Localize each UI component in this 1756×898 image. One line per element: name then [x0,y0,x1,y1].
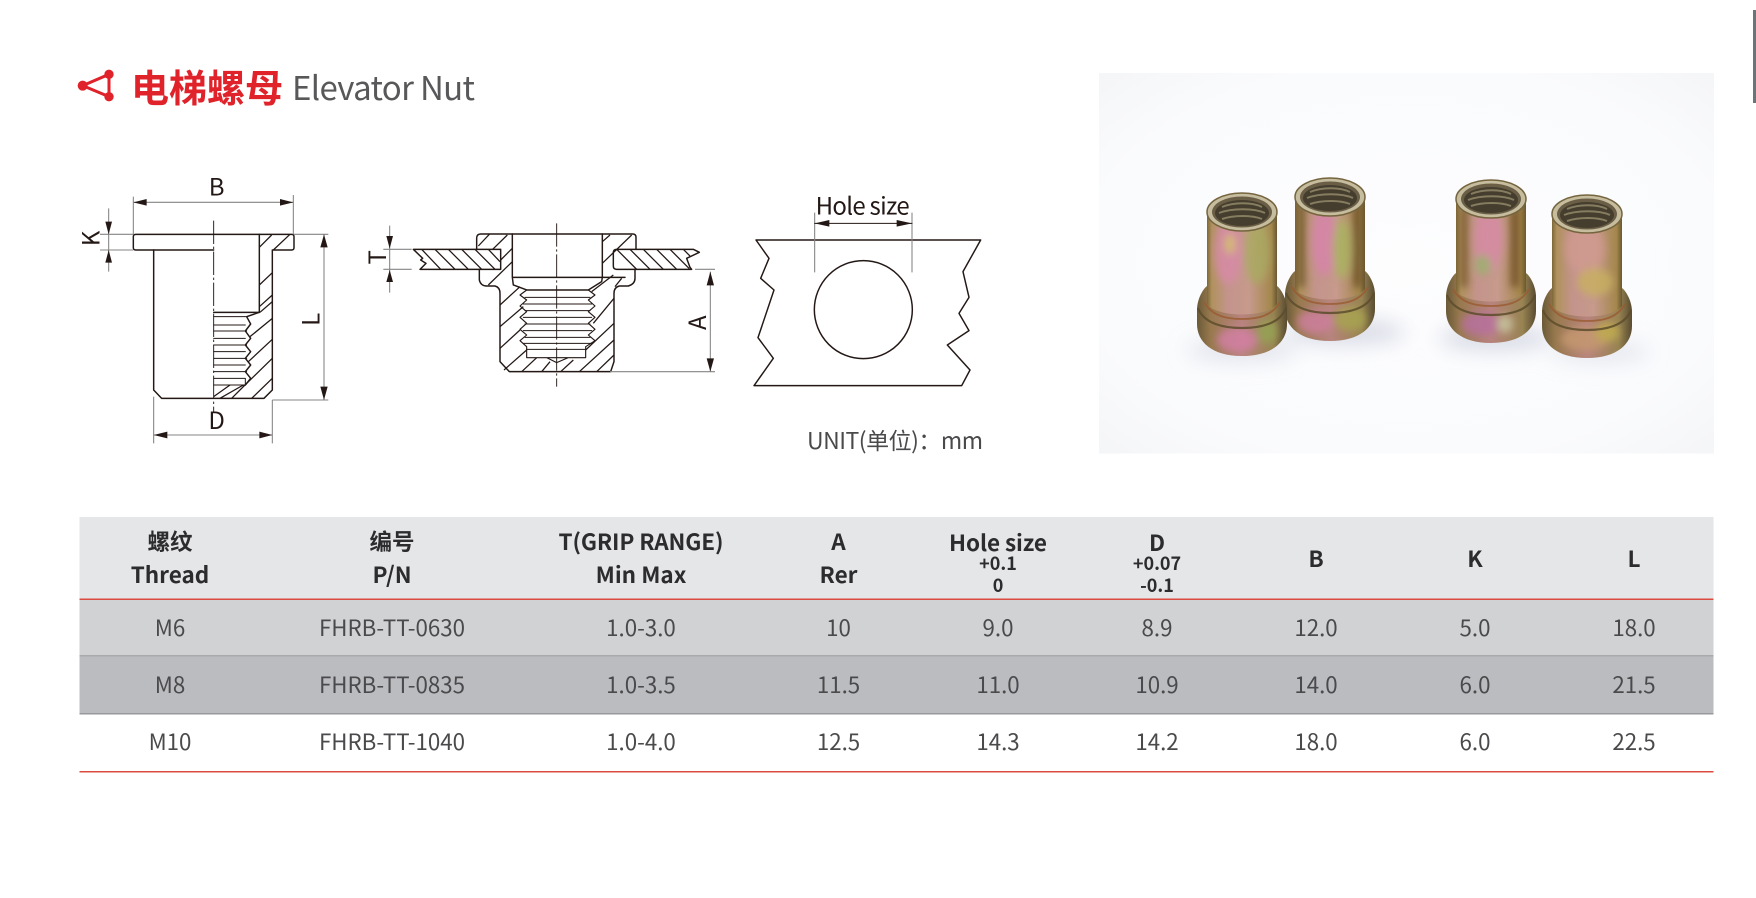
table header row: L [1627,542,1641,574]
table header row: Hole size [949,526,1047,558]
row M8: 10.9 [1135,668,1179,700]
table header row: -0.1 [1140,572,1174,598]
row M6: 10 [826,611,851,643]
section title [78,58,475,113]
row M8: 14.0 [1294,668,1338,700]
row M8: M8 [155,668,185,700]
dimensions: D [208,401,225,436]
row M6: 12.0 [1294,611,1338,643]
hole size dimension [815,186,912,272]
photo background [1099,73,1714,454]
table header row: 螺纹 [147,525,193,557]
dimensions [72,167,328,443]
row M6: 9.0 [983,611,1013,643]
product photo [1099,73,1714,454]
dimensions: T [358,250,393,265]
row M10: 22.5 [1612,725,1656,757]
dimensions: A [678,315,713,330]
title: Chinese: 电梯螺母 [131,58,283,113]
table header row: Rer [820,558,858,590]
diagram: hole size plate [754,186,981,386]
row M6: 1.0-3.0 [606,611,676,643]
row M10: M10 [149,725,191,757]
table header row: 编号 [369,525,415,557]
nut outline [133,221,294,412]
row M10: FHRB-TT-1040 [319,725,465,757]
dimensions [358,226,715,372]
table header row: B [1308,542,1324,574]
row M8 [80,656,1714,714]
shadows [1187,319,1650,363]
dimensions: B [209,167,225,202]
row M10: 14.3 [976,725,1020,757]
table header row [80,517,1714,599]
table header row: 0 [993,572,1003,598]
dimensions: L [292,313,327,326]
row M10: 12.5 [817,725,860,757]
icon: share triangle [78,70,114,101]
row M8: FHRB-TT-0835 [319,668,465,700]
row M8: 21.5 [1612,668,1656,700]
row M6: 5.0 [1460,611,1490,643]
row M8: 11.0 [976,668,1020,700]
row M8: 1.0-3.5 [606,668,676,700]
row M10 [80,714,1714,771]
nut 1 [1197,193,1287,356]
installed nut outline [413,223,699,387]
diagram: nut side section with B K L D dimensions [72,167,328,443]
row M6: M6 [155,611,185,643]
dimensions: K [72,230,107,246]
title: English: Elevator Nut [292,62,475,110]
row M6: 8.9 [1142,611,1172,643]
nut 4 [1542,195,1632,358]
table header row: Thread [131,558,209,590]
plate outline with hole [754,240,981,386]
row M6: FHRB-TT-0630 [319,611,465,643]
row M8: 11.5 [817,668,860,700]
table header row: T(GRIP RANGE) [558,525,724,557]
nut 3 [1446,180,1536,343]
row M6: 18.0 [1612,611,1656,643]
row M10: 14.2 [1135,725,1179,757]
row M6 [80,599,1714,656]
table header row: D [1149,526,1165,558]
table header row: +0.07 [1133,550,1181,576]
row M10: 18.0 [1294,725,1338,757]
page edge mark [1753,10,1756,103]
specification table [80,517,1714,772]
table header row: Min Max [596,558,687,590]
hole size dimension: Hole size [816,186,910,221]
table header row: +0.1 [979,550,1017,576]
table header row: K [1467,542,1483,574]
table header row: P/N [372,558,412,590]
nut 2 [1285,178,1375,341]
unit note: UNIT(单位)：mm [807,422,983,456]
diagram: installed nut in sheet with T and A dimensions [358,223,715,387]
row M10: 6.0 [1460,725,1490,757]
row M8: 6.0 [1460,668,1490,700]
row M10: 1.0-4.0 [606,725,676,757]
table header row: A [830,525,846,557]
